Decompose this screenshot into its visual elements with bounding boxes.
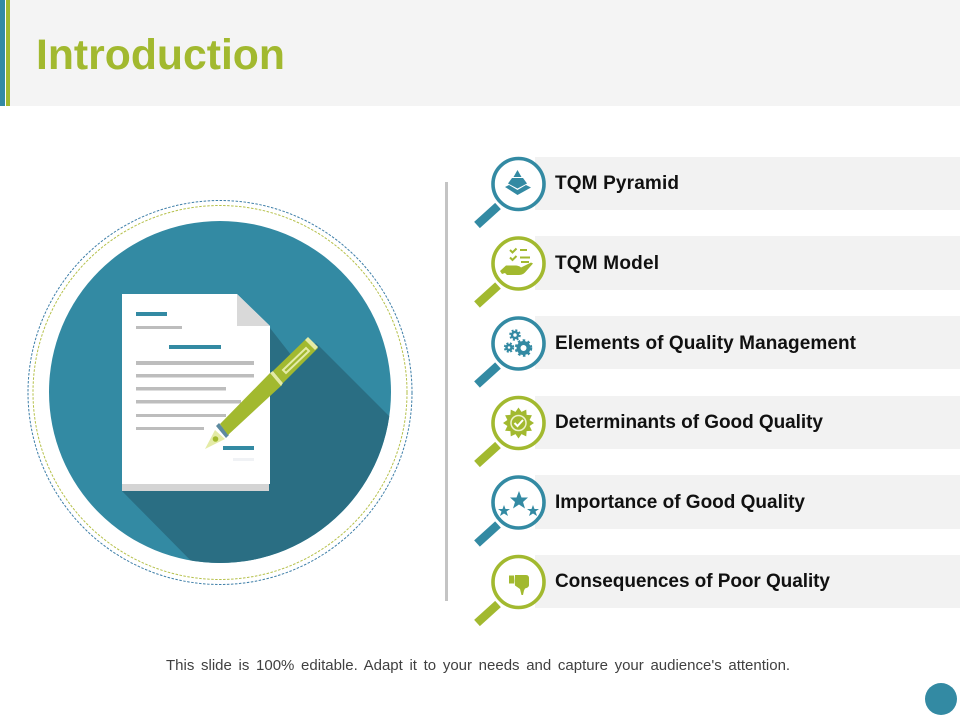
item 4: Determinants of Good Quality: Determinants of Good Quality [555, 412, 823, 433]
header band [0, 0, 960, 106]
pen [205, 337, 318, 449]
long shadow [122, 328, 400, 570]
title: Introduction [36, 31, 285, 79]
icon: badge with check [503, 408, 534, 438]
magnifier [477, 318, 544, 384]
magnifier [477, 556, 544, 623]
item 6: Consequences of Poor Quality [477, 555, 960, 623]
magnifier [477, 238, 544, 304]
magnifier [477, 477, 544, 544]
item 2: TQM Model [477, 236, 960, 304]
magnifier [477, 158, 544, 225]
illustration: document and pen in circle [28, 200, 412, 584]
item 3: Elements of Quality Management [477, 316, 960, 384]
vertical divider [445, 182, 448, 601]
item 2: TQM Model: TQM Model [555, 253, 659, 274]
page number dot [925, 683, 957, 715]
item 3: Elements of Quality Management: Elements of Quality Management [555, 333, 857, 354]
icon: hand with checklist [500, 248, 533, 275]
dashed outer ring [28, 200, 412, 584]
item 6: Consequences of Poor Quality: Consequences of Poor Quality [555, 571, 830, 592]
item 5: Importance of Good Quality: Importance of Good Quality [555, 492, 805, 513]
teal disc [49, 221, 391, 563]
item 1: TQM Pyramid: TQM Pyramid [555, 173, 679, 194]
magnifier [477, 398, 544, 464]
footer text: This slide is 100% editable. Adapt it to your needs and capture your audience's attention. [166, 657, 790, 674]
dashed inner ring [33, 206, 407, 580]
icon: thumbs down [509, 575, 529, 595]
item 1: TQM Pyramid [477, 157, 960, 225]
icon: pyramid [505, 170, 531, 195]
item 4: Determinants of Good Quality [477, 396, 960, 464]
icon: three stars [498, 491, 539, 516]
item 5: Importance of Good Quality [477, 475, 960, 544]
icon: gears [505, 330, 531, 356]
document [122, 294, 270, 491]
